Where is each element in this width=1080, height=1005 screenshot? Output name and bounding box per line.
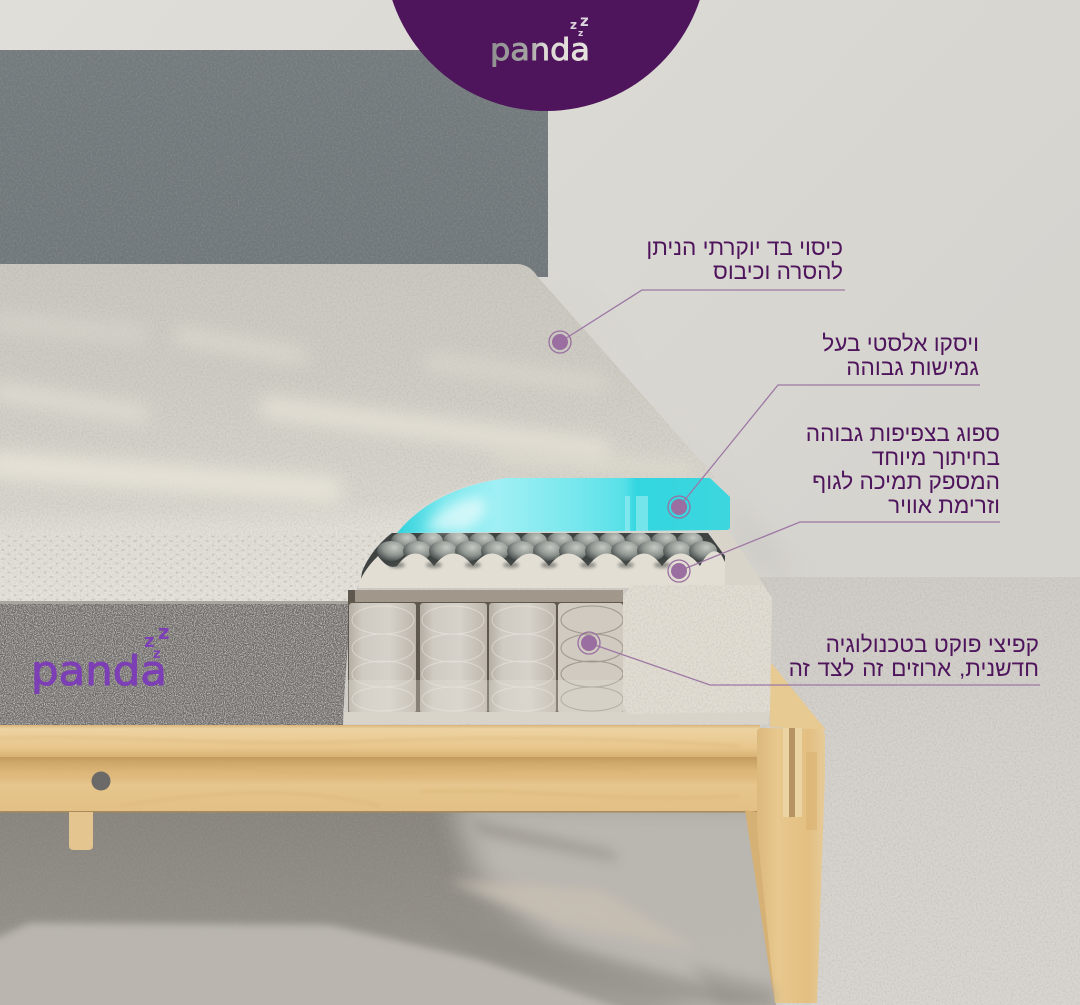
callout: viscoelastic: גמישות גבוהה (846, 355, 979, 380)
spring column 4 (558, 603, 623, 713)
gel memory foam layer (397, 478, 730, 533)
callout: viscoelastic: ויסקו אלסטי בעל (822, 331, 979, 356)
spring column 3 (489, 603, 556, 713)
side logo sleep letters: z (144, 631, 154, 652)
callout: pocket springs: חדשנית, ארוזים זה לצד זה (789, 656, 1039, 681)
callout: high density foam (668, 421, 1000, 582)
small back leg (69, 812, 93, 850)
side logo sleep letters (144, 620, 170, 662)
mattress cover (0, 264, 716, 603)
egg crate foam layer (358, 532, 725, 588)
callout: cover: להסרה וכיבוס (713, 259, 843, 284)
pocket springs (348, 590, 623, 714)
brand circle with logo (384, 0, 708, 111)
logo sleep letters (570, 12, 589, 39)
foam valley shadows (389, 562, 670, 568)
callout: high density foam: בחיתוך מיוחד (872, 445, 1000, 470)
logo sleep letters: z (578, 29, 583, 39)
mattress cast shadow on wall (548, 290, 800, 577)
spring column 2 (420, 603, 487, 713)
callout: pocket springs (578, 632, 1040, 685)
frame knob (92, 772, 110, 790)
spring column 1 (349, 603, 416, 713)
callout: viscoelastic (668, 331, 980, 518)
foam side block (623, 585, 772, 714)
foam scalloped front (358, 551, 725, 588)
floor (0, 577, 1080, 1005)
logo: panda: panda (490, 33, 590, 68)
bed frame far side rail (769, 664, 826, 730)
side logo sleep letters: z (158, 620, 170, 644)
callout: cover: כיסוי בד יוקרתי הניתן (646, 235, 843, 260)
callout: high density foam: וזרימת אוויר (888, 493, 1000, 518)
logo sleep letters: z (580, 12, 589, 30)
cover edge strip (0, 601, 352, 604)
callout: cover (549, 235, 845, 353)
side logo sleep letters: z (153, 647, 161, 662)
foam base strip (344, 712, 770, 724)
bed frame rails (0, 725, 760, 812)
side logo: panda: panda (31, 647, 167, 695)
mattress side grey fabric (0, 604, 352, 725)
callout: high density foam: המספק תמיכה לגוף (812, 469, 1000, 494)
callout: high density foam: ספוג בצפיפות גבוהה (806, 421, 1000, 446)
back tan foam panel (712, 530, 772, 598)
foam bumps (377, 532, 717, 561)
leg cast shadow (690, 965, 775, 1005)
headboard (0, 50, 548, 277)
logo sleep letters: z (570, 18, 577, 32)
wall background (0, 0, 1080, 577)
corner leg (745, 728, 825, 1003)
callout: pocket springs: קפיצי פוקט בטכנולוגיה (826, 632, 1039, 657)
